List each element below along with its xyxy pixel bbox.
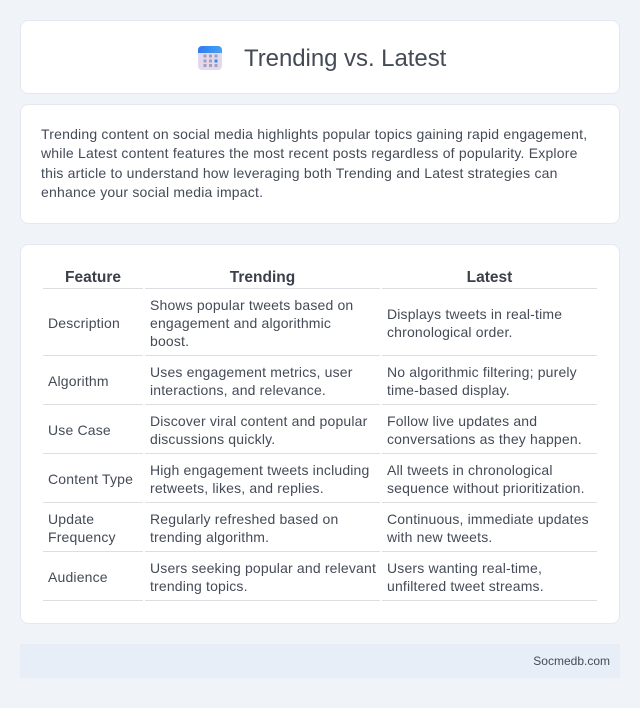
Algorithm: Latest [387,364,577,398]
Use Case: Trending [150,413,368,447]
Description: Trending: Shows popular tweets based on [150,297,353,313]
Use Case: Latest: conversations as they happen. [387,431,582,447]
row: Update Frequency [48,511,116,545]
Description: Latest: Displays tweets in real-time [387,306,562,322]
Description: Latest [387,306,562,340]
icon: calendar [198,46,222,70]
text block: introduction: Trending content on social media highlights popular topics gaining rapid engagement, [41,126,587,142]
panel: title card [20,20,620,94]
Update Frequency: Trending: Regularly refreshed based on [150,511,338,527]
row: Description: Description [48,315,120,331]
Algorithm: Trending: Uses engagement metrics, user [150,364,353,380]
Content Type: Trending [150,462,369,496]
Update Frequency: Latest: Continuous, immediate updates [387,511,589,527]
Description: Trending: engagement and algorithmic [150,315,331,331]
text block: introduction: this article to understand how leveraging both Trending and Latest strategies can [41,165,558,181]
Algorithm: Latest: No algorithmic filtering; purely [387,364,577,380]
table header: Latest: Latest [467,269,512,286]
Audience: Trending: trending topics. [150,578,248,594]
panel: comparison table [20,244,620,624]
Audience: Latest [387,560,544,594]
Audience: Latest: unfiltered tweet streams. [387,578,544,594]
Algorithm: Latest: time-based display. [387,382,510,398]
Description: Latest: chronological order. [387,324,513,340]
row: Use Case: Use Case [48,422,111,438]
Use Case: Trending: Discover viral content and popular [150,413,367,429]
row: Algorithm: Algorithm [48,373,109,389]
Algorithm: Trending: interactions, and relevance. [150,382,326,398]
footer text: source: Socmedb.com [533,654,610,668]
Update Frequency: Trending [150,511,338,545]
Content Type: Latest: All tweets in chronological [387,462,553,478]
title: Trending vs. Latest [244,45,446,72]
Update Frequency: Trending: trending algorithm. [150,529,269,545]
Use Case: Latest: Follow live updates and [387,413,537,429]
text block: introduction: enhance your social media impact. [41,184,263,200]
Update Frequency: Latest: with new tweets. [387,529,492,545]
row: Update Frequency: Frequency [48,529,116,545]
text block: introduction [41,126,587,200]
Description: Trending [150,297,353,349]
row: Content Type: Content Type [48,471,133,487]
Algorithm: Trending [150,364,353,398]
table header: Trending: Trending [230,269,295,286]
footer bar [20,644,620,678]
Update Frequency: Latest [387,511,589,545]
Audience: Latest: Users wanting real-time, [387,560,542,576]
Content Type: Latest [387,462,585,496]
Content Type: Trending: High engagement tweets including [150,462,369,478]
row: Update Frequency: Update [48,511,94,527]
table header: Feature: Feature [65,269,121,286]
panel: introduction [20,104,620,224]
Content Type: Trending: retweets, likes, and replies. [150,480,324,496]
text block: introduction: while Latest content features the most recent posts regardless of popularity. Explore [41,145,578,161]
row: Audience: Audience [48,569,108,585]
Use Case: Trending: discussions quickly. [150,431,275,447]
Use Case: Latest [387,413,582,447]
Content Type: Latest: sequence without prioritization. [387,480,585,496]
Audience: Trending: Users seeking popular and relevant [150,560,376,576]
Audience: Trending [150,560,376,594]
Description: Trending: boost. [150,333,189,349]
